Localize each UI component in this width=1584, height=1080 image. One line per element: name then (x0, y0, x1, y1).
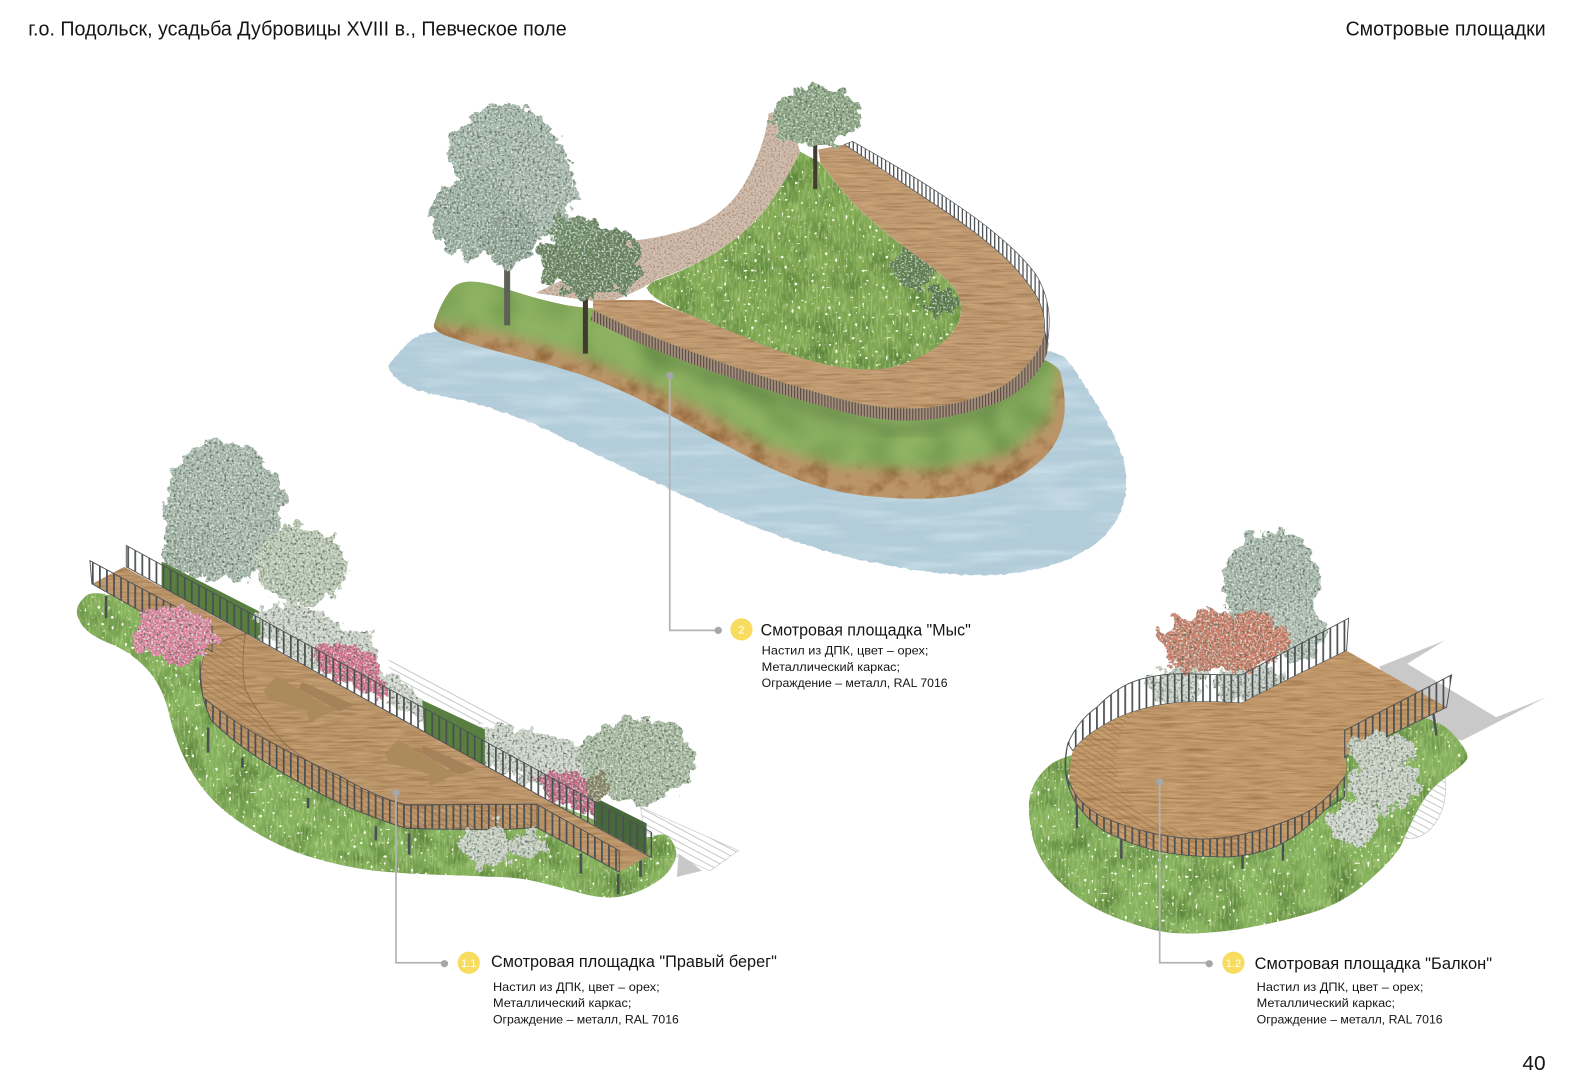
callout: Cape (730, 618, 971, 690)
shadow (1379, 640, 1547, 740)
white bush behind (1147, 667, 1293, 707)
number badge 1.2 (1222, 952, 1245, 974)
ground (1029, 710, 1468, 934)
callout description: Ограждение – металл, RAL 7016 (1257, 1012, 1443, 1026)
support posts (1077, 707, 1437, 869)
white bushes (1325, 733, 1419, 844)
wooden deck (593, 144, 1045, 409)
callout description: Настил из ДПК, цвет – орех; (493, 980, 660, 994)
slatted walkway (200, 633, 536, 830)
callout description: Ограждение – металл, RAL 7016 (762, 676, 948, 690)
number badge 2: 2 (738, 624, 745, 636)
title: г.о. Подольск, усадьба Дубровицы XVIII в., Певческое поле (28, 18, 567, 40)
tree: right (582, 718, 695, 803)
wooden deck (1070, 651, 1447, 857)
leader line: Balcony (1156, 778, 1213, 967)
tree: small green (540, 215, 641, 354)
bench 1 (264, 676, 355, 722)
hedge (162, 562, 647, 854)
callout heading: Смотровая площадка "Балкон" (1255, 955, 1492, 973)
callout heading: Смотровая площадка "Мыс" (761, 621, 971, 639)
lower grass slope (419, 265, 1061, 470)
small trees (893, 249, 958, 317)
callout description: Металлический каркас; (762, 660, 900, 674)
callout description: Ограждение – металл, RAL 7016 (493, 1012, 679, 1026)
callout description (493, 980, 679, 1026)
callout description (762, 644, 948, 690)
slatted rim (1070, 710, 1276, 857)
callout description (1257, 980, 1443, 1026)
bench 2 (385, 739, 476, 786)
callout: Right Bank (458, 952, 777, 1026)
back railing (1068, 618, 1349, 751)
deck side railing (591, 310, 1049, 421)
callout description: Настил из ДПК, цвет – орех; (1257, 980, 1423, 994)
right railing (1345, 675, 1452, 758)
illustration: viewing platform Right Bank (77, 440, 738, 898)
hatch plan (1373, 737, 1446, 838)
leader line: Cape (666, 372, 722, 634)
gravel slope (535, 111, 800, 303)
support posts (106, 596, 640, 894)
tree: red (1160, 610, 1293, 675)
front railing (1065, 744, 1345, 857)
callout description: Настил из ДПК, цвет – орех; (762, 644, 928, 658)
tree: grey (1222, 531, 1326, 660)
wooden deck (92, 567, 650, 872)
upper railing (126, 546, 652, 858)
leader line: Right Bank (392, 789, 448, 967)
illustration: viewing platform Balcony (1029, 531, 1547, 934)
left railing (90, 561, 212, 652)
section title: Смотровые площадки (1346, 18, 1546, 40)
callout description: Металлический каркас; (493, 996, 631, 1010)
illustration: viewing platform Cape (389, 86, 1126, 575)
number badge 1.2: 1.2 (1226, 958, 1241, 970)
tree: large grey (162, 440, 348, 606)
ground (77, 593, 676, 898)
meadow (647, 152, 961, 369)
tree: large grey (430, 104, 575, 325)
riverbank soil (434, 282, 1065, 499)
callout description: Металлический каркас; (1257, 996, 1395, 1010)
callout heading: Смотровая площадка "Правый берег" (491, 953, 777, 971)
number badge 1.1 (458, 952, 480, 974)
lower railing (200, 661, 619, 872)
page number: 40 (1522, 1053, 1546, 1075)
white bushes (462, 826, 552, 867)
back railing (845, 141, 1049, 349)
tree: pink (131, 608, 216, 667)
number badge 1.1: 1.1 (461, 958, 476, 970)
tree: summit (774, 86, 859, 189)
callout: Balcony (1222, 952, 1492, 1026)
hatch plan (389, 657, 738, 877)
water (389, 330, 1126, 575)
number badge 2 (730, 618, 753, 640)
